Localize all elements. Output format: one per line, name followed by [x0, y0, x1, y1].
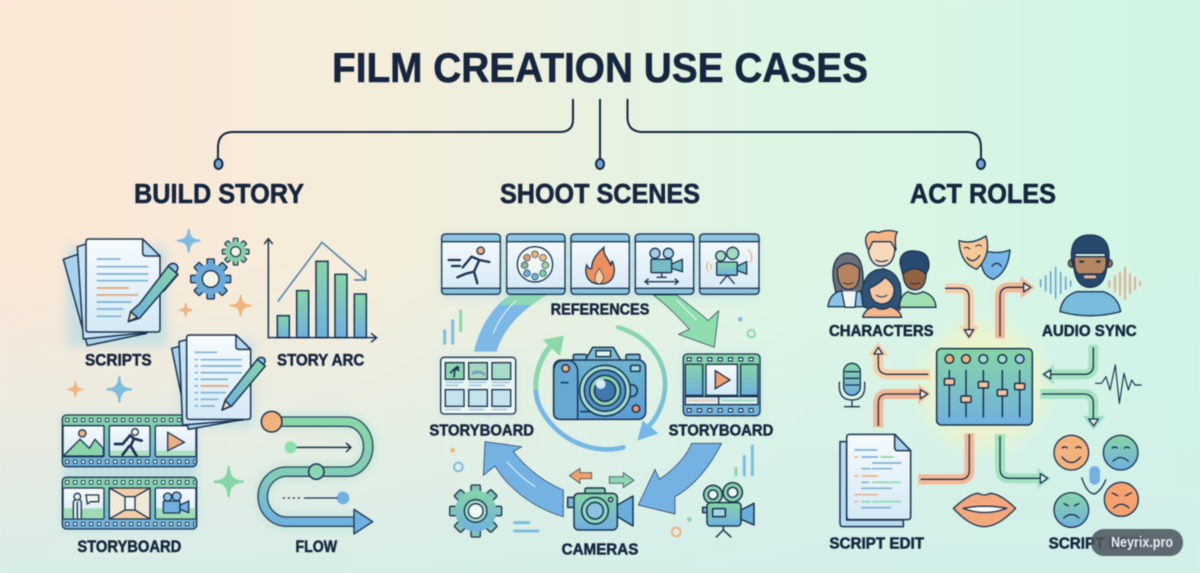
watermark badge [1091, 529, 1183, 556]
panel: act roles [828, 230, 1144, 552]
icon: central camera [554, 347, 646, 419]
icon: script stack with pen [63, 239, 178, 346]
icon: characters group [828, 230, 936, 317]
icon: storyboard film strip one [62, 415, 197, 467]
label: script edit: SCRIPT EDIT [829, 535, 924, 552]
icon: reference window flame [571, 234, 629, 294]
title: FILM CREATION USE CASES [332, 44, 868, 91]
label: cameras: CAMERAS [562, 541, 639, 558]
arrow: script edit to mixer [878, 384, 931, 427]
label: flow: FLOW [295, 537, 338, 556]
icon: lips [953, 493, 1016, 527]
label: left storyboard: STORYBOARD [429, 422, 534, 439]
arrows: outer cycle [474, 295, 722, 517]
arrow: mixer to audio sync [1000, 277, 1035, 338]
icon: microphone [839, 363, 865, 407]
panel: shoot scenes [429, 234, 773, 558]
label: right storyboard: STORYBOARD [669, 422, 773, 439]
arrow: mixer to lips [918, 433, 969, 479]
icon: reference window running figure [442, 234, 500, 294]
label: characters: CHARACTERS [829, 323, 934, 340]
icon: storyboard grid [441, 357, 516, 414]
arrow: mixer to emotions [1040, 394, 1105, 430]
icon: audio sync person [1060, 235, 1121, 316]
icon: cameras [568, 488, 633, 530]
arrow: characters to mixer [945, 288, 979, 340]
arrows: inner ring around camera [536, 327, 665, 449]
watermark badge: Neyrix.pro [1111, 534, 1173, 551]
label: script edit right: SCRIPT EDIT [1049, 535, 1144, 552]
icon: theatre masks [959, 236, 1010, 279]
label: storyboard: STORYBOARD [77, 537, 181, 556]
icon: audio waveform [1095, 365, 1142, 403]
arrow: mixer to characters [868, 342, 930, 374]
icon: reference window tripod camera [700, 234, 759, 294]
panel: build story [62, 230, 377, 556]
icon: emotion faces [1054, 435, 1138, 527]
icon: second script stack with pen [172, 335, 265, 429]
label: references: REFERENCES [551, 302, 650, 319]
heading: act roles: ACT ROLES [910, 178, 1056, 209]
icon: small decorative bars and dots [445, 311, 755, 536]
soft glows behind icons [442, 237, 760, 417]
icon: small direction arrows [569, 468, 634, 488]
label: scripts: SCRIPTS [85, 350, 152, 369]
label: audio sync: AUDIO SYNC [1042, 323, 1137, 340]
icon: tripod video camera [703, 483, 754, 537]
soft glows behind icons [63, 247, 368, 530]
heading: shoot scenes: SHOOT SCENES [500, 178, 700, 209]
icon: reference window color wheel [507, 234, 565, 294]
icon: reference window camera with arrows [635, 234, 694, 294]
icon: sparkles [68, 230, 251, 496]
icon: storyboard film strip two [62, 477, 197, 529]
icon: script edit document [840, 434, 911, 527]
icon: flow path [261, 411, 373, 534]
icon: gears [191, 238, 249, 299]
mixer glow [909, 312, 1059, 462]
chart: story arc bars [264, 239, 377, 342]
heading: build story: BUILD STORY [134, 178, 304, 209]
icon: gear [450, 485, 502, 537]
connectors from title to sections [214, 99, 985, 169]
icon: sound waves [1041, 267, 1140, 299]
label: story arc: STORY ARC [277, 350, 364, 369]
arrow: audio sync to mixer [1041, 345, 1093, 385]
icon: mixer console [937, 349, 1032, 425]
arrow: mixer to script edit [1000, 434, 1051, 489]
icon: video player strip [683, 354, 760, 416]
